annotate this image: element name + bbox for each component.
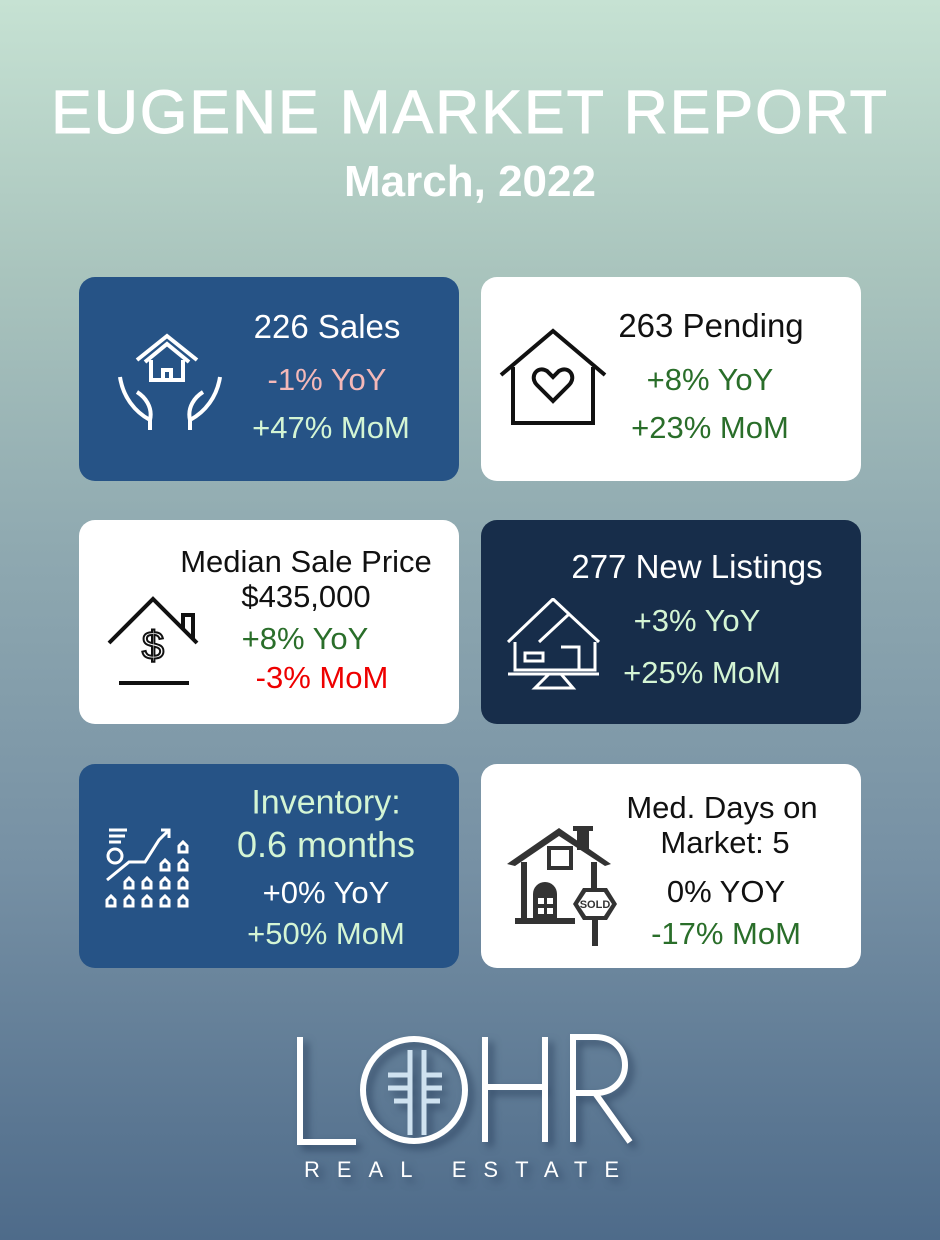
icon: house dollar: $ <box>142 624 164 668</box>
logo <box>297 1034 638 1182</box>
panel: days on market <box>481 764 861 968</box>
subtitle: March, 2022 <box>344 157 596 206</box>
panel: days on market: 0% YOY <box>667 874 785 909</box>
panel: inventory: +50% MoM <box>247 916 405 951</box>
panel: median price: -3% MoM <box>256 660 388 695</box>
icon: house in hands <box>118 334 222 430</box>
stat text: Med. Days on <box>626 790 818 825</box>
panel: inventory: +0% YoY <box>263 875 389 910</box>
stat text: 277 New Listings <box>571 548 823 585</box>
icon: sold house: SOLD <box>580 899 610 911</box>
title: EUGENE MARKET REPORT <box>51 78 889 146</box>
panel: pending <box>481 277 861 481</box>
panel: median price: $435,000 <box>241 579 371 614</box>
stat text: Inventory: <box>251 784 401 822</box>
stat text: 263 Pending <box>618 307 804 344</box>
panel: sales: -1% YoY <box>268 362 386 397</box>
panel: new listings <box>481 520 861 724</box>
stat text: Median Sale Price <box>180 544 432 579</box>
panel: days on market: Market: 5 <box>660 825 790 860</box>
panel: inventory: 0.6 months <box>237 824 415 865</box>
panel: days on market: -17% MoM <box>651 916 801 951</box>
panel: sales <box>79 277 459 481</box>
icon: rising houses chart <box>106 828 188 908</box>
panel: new listings: +3% YoY <box>634 603 760 638</box>
panel: inventory <box>79 764 459 968</box>
icon: house dollar <box>108 596 198 685</box>
stat text: 226 Sales <box>254 308 400 345</box>
logo: REAL ESTATE <box>304 1157 636 1182</box>
panel: median price: +8% YoY <box>242 621 368 656</box>
panel: new listings: +25% MoM <box>623 655 781 690</box>
panel: pending: +8% YoY <box>647 362 773 397</box>
icon: house outline <box>507 598 600 690</box>
icon: house heart <box>500 328 606 425</box>
panel: sales: +47% MoM <box>252 410 410 445</box>
panel: pending: +23% MoM <box>631 410 789 445</box>
icon: sold house <box>507 826 617 946</box>
panel: median price <box>79 520 459 724</box>
